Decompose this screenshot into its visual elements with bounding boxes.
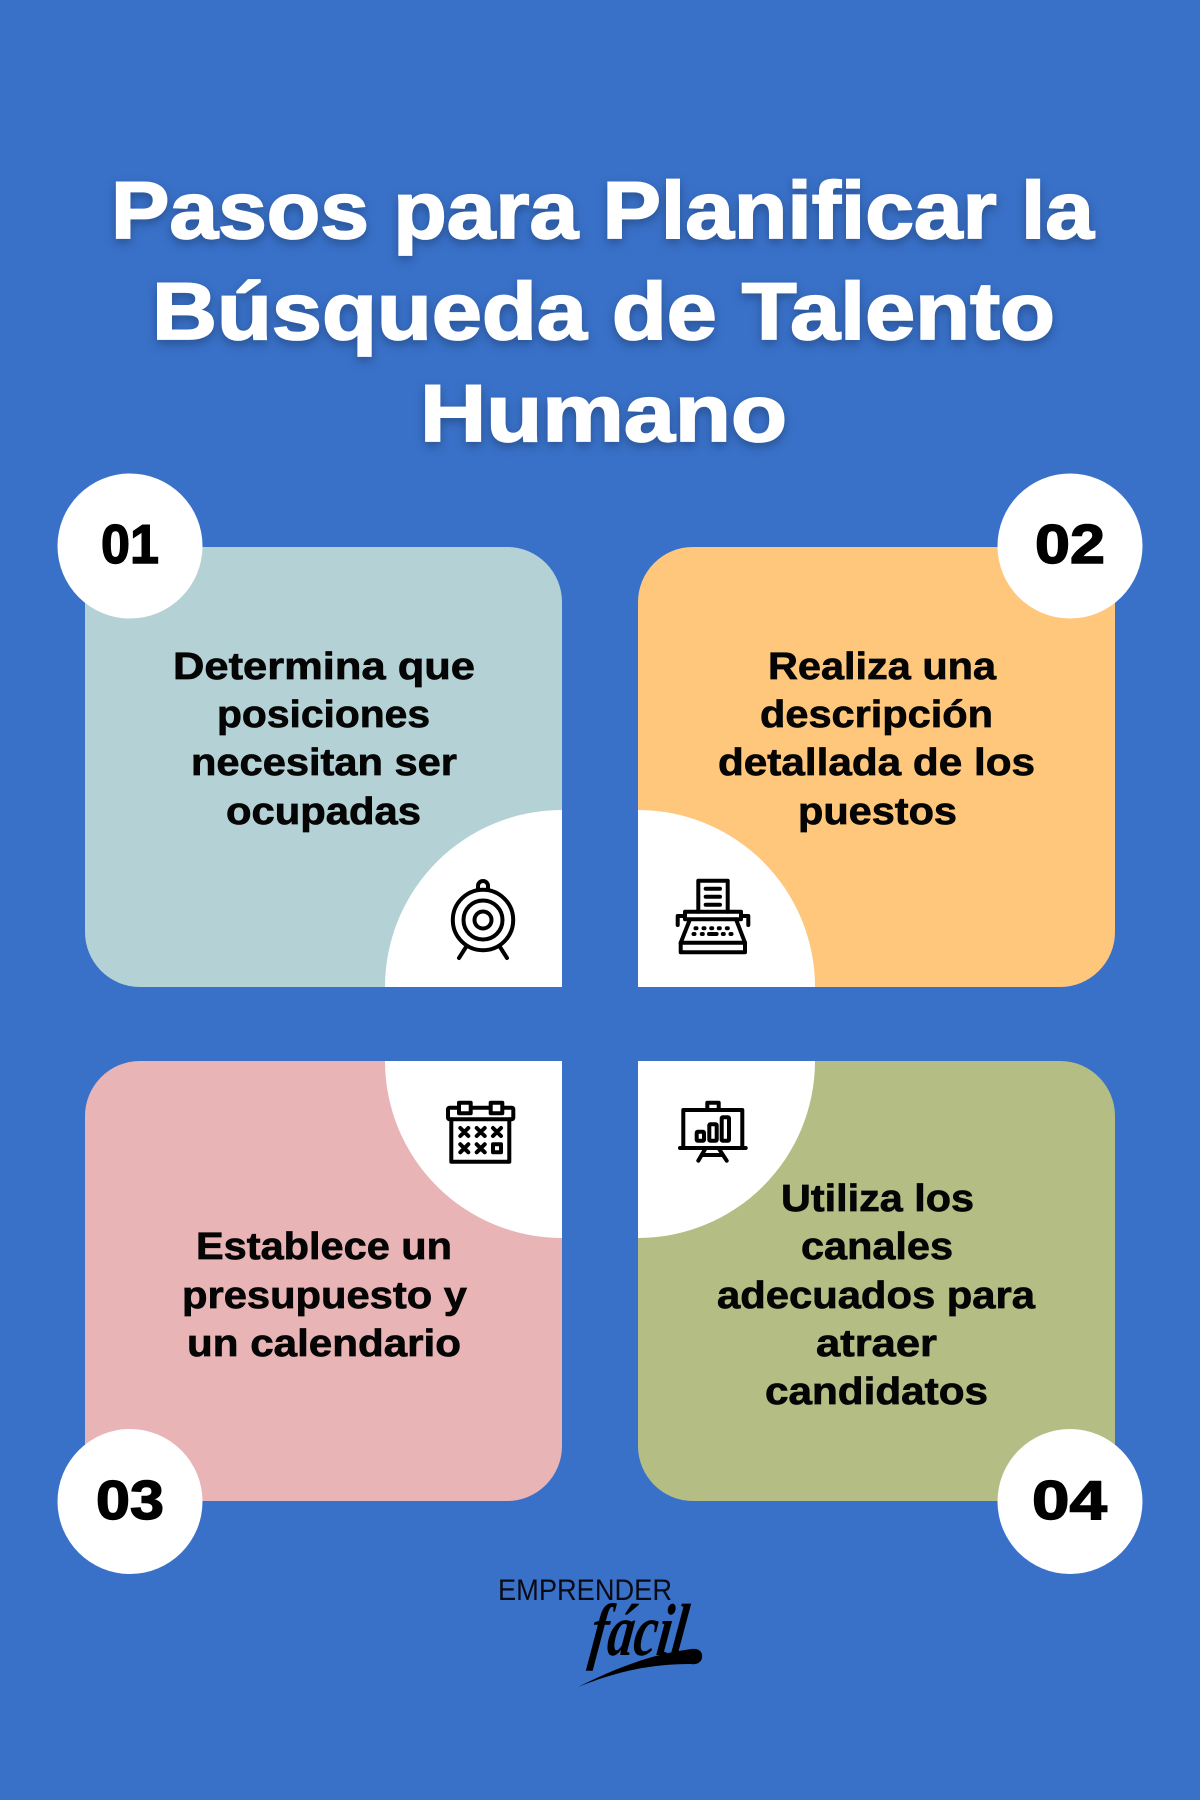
text: step 04: adecuados para	[717, 1275, 1036, 1317]
number badge 03: 03	[96, 1469, 164, 1531]
text: step 03: presupuesto y	[182, 1275, 467, 1317]
panel: step 04	[638, 1061, 1142, 1574]
number badge 01: 01	[101, 513, 159, 575]
text: step 03: un calendario	[187, 1323, 461, 1365]
panel: step 03	[58, 1061, 562, 1574]
text: step 01: Determina que	[173, 646, 475, 688]
number badge 02: 02	[1035, 513, 1105, 575]
text: step 03	[182, 1226, 467, 1365]
number badge 02	[998, 474, 1142, 618]
title: Pasos para Planificar la	[111, 166, 1095, 256]
logo: Emprender Fácil	[498, 1574, 702, 1687]
panel: step 02	[638, 474, 1142, 987]
logo swoosh	[578, 1649, 702, 1687]
panel: step 01	[58, 474, 562, 987]
text: step 01: posiciones	[217, 694, 430, 736]
number badge 03	[58, 1429, 202, 1574]
card background 04	[638, 1061, 1115, 1501]
number badge 04: 04	[1032, 1469, 1107, 1531]
text: step 04: candidatos	[765, 1371, 988, 1413]
card background 02	[638, 547, 1115, 987]
text: step 03: Establece un	[196, 1226, 452, 1268]
text: step 01: ocupadas	[226, 791, 421, 833]
text: step 04: Utiliza los	[781, 1178, 974, 1220]
title: Humano	[420, 369, 787, 459]
title: Búsqueda de Talento	[152, 267, 1055, 357]
corner quarter circle 01	[385, 810, 562, 987]
text: step 04: atraer	[816, 1323, 937, 1365]
text: step 02: Realiza una	[768, 646, 997, 688]
logo script: fácil: fácil	[586, 1590, 693, 1672]
text: step 02: puestos	[798, 791, 957, 833]
icon: calendar	[448, 1103, 513, 1162]
text: step 02: descripción	[760, 694, 993, 736]
text: step 02: detallada de los	[718, 742, 1035, 784]
corner quarter circle 04	[638, 1061, 815, 1238]
text: step 01	[173, 646, 475, 833]
number badge 01	[58, 474, 202, 618]
card background 03	[85, 1061, 562, 1501]
number badge 04	[998, 1429, 1142, 1574]
text: step 02	[718, 646, 1035, 833]
icon: typewriter	[678, 881, 748, 952]
text: step 04	[717, 1178, 1036, 1413]
text: step 04: canales	[801, 1226, 953, 1268]
corner quarter circle 03	[385, 1061, 562, 1238]
logo wordmark: EMPRENDER: EMPRENDER	[498, 1574, 672, 1607]
corner quarter circle 02	[638, 810, 815, 987]
text: step 01: necesitan ser	[191, 742, 457, 784]
card background 01	[85, 547, 562, 987]
icon: presentation board	[680, 1103, 746, 1161]
title	[111, 166, 1095, 459]
icon: target	[453, 881, 513, 958]
